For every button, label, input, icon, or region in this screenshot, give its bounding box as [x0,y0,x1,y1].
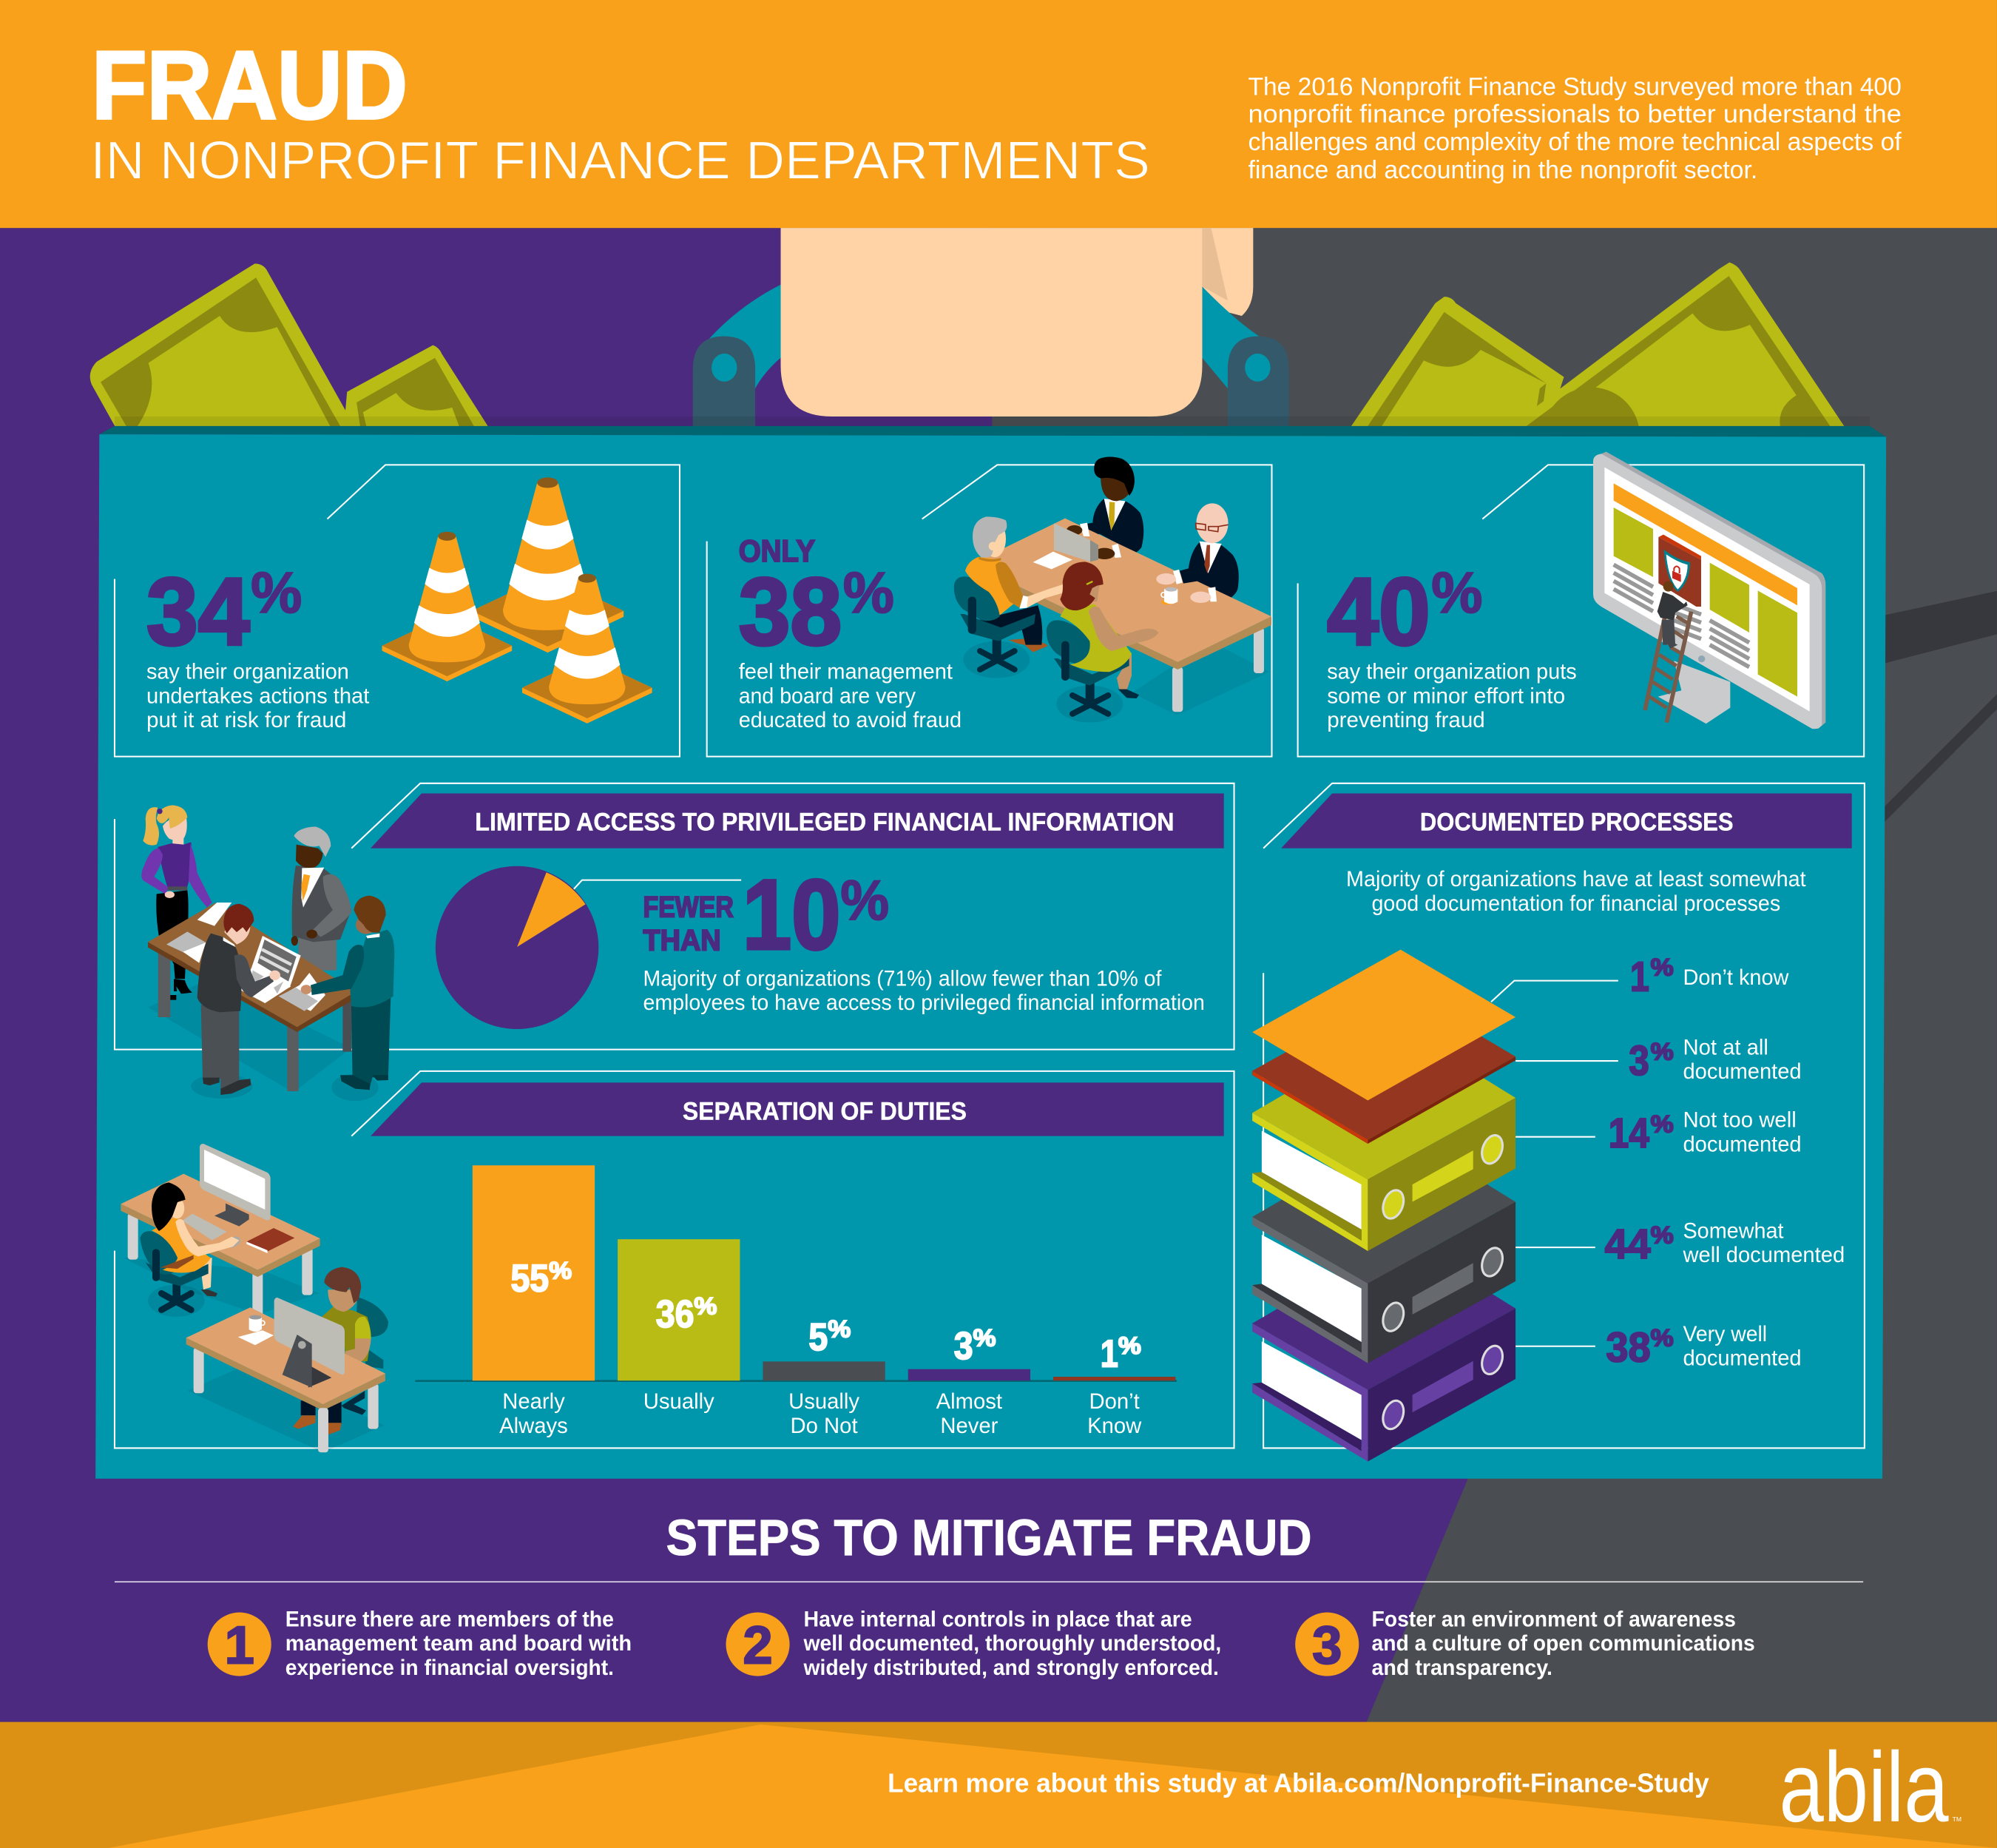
legend: 14% not too well [1609,1109,1802,1157]
bar: almost never [908,1324,1030,1438]
tab right [1228,337,1289,428]
icon: coffee mug [1161,587,1177,604]
step 1: management team and board with [285,1632,632,1656]
step 1 [208,1608,632,1680]
stat: 40%: % [1431,562,1482,625]
main panel [95,426,1886,1479]
bar: almost never: Almost [936,1390,1002,1414]
legend: 14% not too well: Not too well [1683,1109,1797,1133]
step 1: 1 [225,1616,254,1675]
bar: don't know: Don’t [1089,1390,1140,1414]
shield block [1658,535,1701,607]
illustration: meeting table [954,456,1271,723]
intro text: finance and accounting in the nonprofit sector. [1248,156,1757,184]
text lines [1614,564,1749,667]
stat: only 38%: ONLY [739,534,815,568]
sheet: rust [1252,988,1516,1144]
banner: separation of duties: SEPARATION OF DUTIES [683,1097,967,1125]
footer band [0,1722,1997,1848]
stat: 40%: 40 [1327,559,1430,665]
keyboard, mouse and book [183,1214,294,1253]
stat: 40%: some or minor effort into [1327,684,1565,708]
legend: 3% not at all: documented [1683,1060,1802,1084]
stat: only 38% [739,534,962,732]
legend: 44% somewhat: 44 [1605,1221,1651,1268]
bar: nearly always: % [549,1256,572,1284]
intro text [1248,72,1902,184]
stat: only 38%: % [843,562,894,625]
person: man at desk [293,1267,388,1434]
strap [693,284,782,388]
step 1: experience in financial oversight. [285,1656,614,1680]
footer band: TM [1953,1815,1961,1823]
subtitle: IN NONPROFIT FINANCE DEPARTMENTS [90,132,1150,191]
person on ladder [1658,581,1688,649]
bar: usually: 36 [656,1292,694,1335]
person: man in teal [301,896,394,1090]
legend: 38% very well: 38 [1606,1324,1651,1371]
bar: usually [618,1239,740,1414]
illustration: monitor with security shield [1593,452,1825,729]
bar: nearly always: 55 [510,1257,549,1300]
palm [781,228,1202,417]
bar: almost never: 3 [954,1324,973,1367]
stat: only 38%: 38 [739,559,842,665]
logo: abila: abila [1779,1732,1949,1843]
stat: 40% [1327,559,1577,732]
person: gray-haired person in chair [954,516,1063,678]
legend: 14% not too well: 14 [1609,1110,1649,1157]
step 2: well documented, thoroughly understood, [803,1632,1221,1656]
banner: documented processes: DOCUMENTED PROCESSES [1420,808,1734,836]
monitor two [274,1298,345,1388]
legend: 1% don't know [1630,954,1789,1000]
step 2 [726,1608,1221,1680]
binder: gray [1252,1130,1516,1363]
legend: 3% not at all: % [1651,1037,1674,1065]
bar: nearly always: Nearly [502,1390,565,1414]
monitor one [200,1144,271,1227]
bar chart [415,1165,1177,1438]
bar: usually: % [694,1292,717,1320]
legend: 44% somewhat: % [1651,1221,1674,1248]
tab left [693,337,755,428]
step 3: and a culture of open communications [1371,1632,1755,1656]
binder: lime [1252,1027,1516,1251]
bar: usually do not [763,1315,885,1438]
legend: 14% not too well: documented [1683,1133,1802,1156]
documented intro text: good documentation for financial processes [1371,892,1780,916]
legend: 38% very well: documented [1683,1347,1802,1371]
legend: 1% don't know: 1 [1630,954,1649,1000]
paper [1033,552,1072,569]
legend: 44% somewhat: Somewhat [1683,1219,1784,1243]
bar: don't know [1053,1332,1175,1438]
standing table [148,903,351,1091]
stat: fewer than 10%: % [840,869,889,932]
pie chart [436,866,741,1029]
step 2: Have internal controls in place that are [804,1608,1192,1631]
sleeves and hands [1067,523,1217,603]
banner: documented processes [1281,794,1852,849]
step 3: 3 [1312,1616,1342,1675]
content blocks [1614,507,1797,697]
stat: 34%: put it at risk for fraud [146,709,346,732]
icon: binder stack [1252,950,1516,1462]
title: FRAUD [92,31,408,139]
legend: 1% don't know: % [1651,954,1674,981]
stat: 34%: % [251,562,302,625]
person: woman at desk [140,1182,239,1317]
icon: money bills right [1350,263,1845,428]
bar: almost never: % [973,1324,996,1352]
stat: only 38%: and board are very [739,684,916,708]
legend: 3% not at all: 3 [1629,1038,1649,1085]
banner: separation of duties [371,1082,1224,1136]
banner: limited access [371,794,1224,849]
stat: only 38%: feel their management [739,661,953,684]
binder: purple [1252,1237,1516,1462]
legend: 14% not too well: % [1651,1110,1674,1138]
stat: fewer than 10%: 10 [743,860,840,971]
step 3: and transparency. [1371,1656,1552,1680]
stat: 34%: 34 [146,559,250,665]
icon: traffic cones [382,477,652,724]
icon: money bills left [90,263,489,428]
stat: 40%: preventing fraud [1327,709,1485,732]
illustration: two workstations [121,1144,388,1452]
stat: 34% [146,559,369,732]
bar: almost never: Never [940,1414,998,1438]
documented intro text [1346,868,1806,916]
legend: 44% somewhat [1605,1219,1845,1268]
icon: laptop [1054,523,1098,562]
bar: nearly always [473,1165,595,1438]
intro text: The 2016 Nonprofit Finance Study surveyed more than 400 [1248,72,1902,101]
stat: fewer than 10% [643,860,1205,1015]
bar: don't know: Know [1087,1414,1142,1438]
stat: only 38%: educated to avoid fraud [739,709,962,732]
heading: steps to mitigate fraud: STEPS TO MITIGATE FRAUD [666,1509,1312,1566]
person: blonde woman [141,805,212,1000]
bar: usually: Usually [643,1390,714,1414]
icon: hand holding folder [693,228,1289,428]
stat: 34%: undertakes actions that [146,684,369,708]
step 3: Foster an environment of awareness [1371,1608,1736,1631]
ladder [1645,612,1692,723]
person: gray-haired man in suit [291,826,351,971]
person: front man in dark sweater [197,904,280,1095]
table top [971,519,1271,670]
header band [0,0,1997,228]
note and mug [238,1315,274,1345]
bar: usually do not: % [828,1315,851,1343]
person: man at back [1081,456,1143,558]
papers [166,903,325,1011]
bar: usually do not: Usually [788,1390,859,1414]
footer link text: Learn more about this study at Abila.com/Nonprofit-Finance-Study [888,1767,1709,1798]
desk two [186,1307,385,1452]
legend: 38% very well: Very well [1683,1323,1767,1346]
step 1: Ensure there are members of the [285,1608,614,1631]
legend: 44% somewhat: well documented [1682,1244,1845,1267]
stat: 40%: say their organization puts [1327,661,1577,684]
banner: limited access: LIMITED ACCESS TO PRIVILEGED FINANCIAL INFORMATION [475,808,1175,836]
bar: usually do not: 5 [808,1315,828,1358]
documented intro text: Majority of organizations have at least somewhat [1346,868,1806,891]
panel frames [115,465,1865,1448]
legend: 38% very well [1606,1323,1802,1371]
illustration: team at standing table [141,805,394,1101]
stat: fewer than 10%: FEWER [643,891,734,924]
bar: don't know: % [1118,1332,1141,1359]
intro text: nonprofit finance professionals to better understand the [1248,101,1902,129]
person: woman in chair [1047,562,1159,723]
bar: usually do not: Do Not [791,1414,858,1438]
stat: 34%: say their organization [146,661,349,684]
legend: 38% very well: % [1651,1324,1674,1352]
thumb [1202,228,1253,316]
legend: 3% not at all [1629,1036,1802,1085]
icon: laptop [240,936,301,1003]
desk one [121,1174,320,1315]
legend: 1% don't know: Don’t know [1683,966,1789,990]
leader lines [1491,981,1618,1346]
stat: fewer than 10%: THAN [643,924,721,957]
banner on screen [1614,483,1797,605]
stat: fewer than 10%: Majority of organizations (71%) allow fewer than 10% of [643,968,1162,991]
intro text: challenges and complexity of the more technical aspects of [1248,128,1902,156]
stat: fewer than 10%: employees to have access to privileged financial information [643,991,1205,1015]
person: bald man [1189,503,1239,604]
bar: don't know: 1 [1101,1332,1118,1375]
step 3 [1295,1608,1755,1680]
bar: nearly always: Always [499,1414,568,1438]
step 2: widely distributed, and strongly enforced. [803,1656,1219,1680]
step 2: 2 [743,1616,773,1675]
sheet: orange [1252,950,1516,1100]
legend: 3% not at all: Not at all [1683,1036,1768,1059]
